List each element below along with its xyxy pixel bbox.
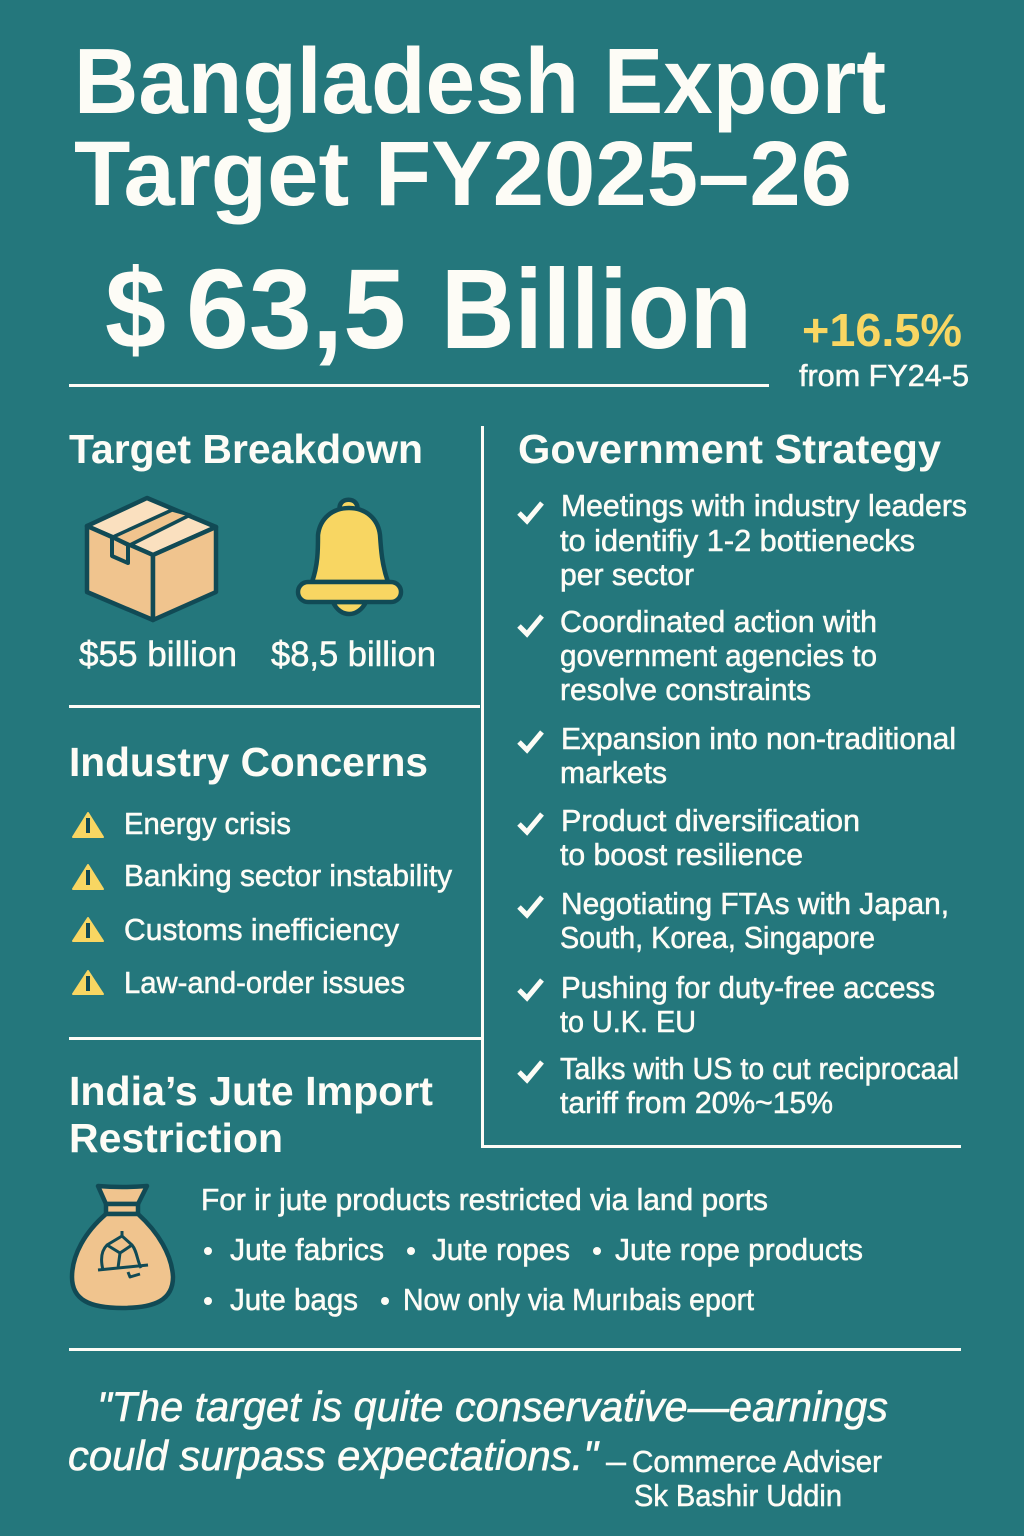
strategy item: product diversification: to boost resilience (560, 837, 803, 872)
strategy item: expansion (519, 721, 956, 790)
title: Target FY2025–26 (74, 123, 852, 225)
strategy item: meetings: Meetings with industry leaders (561, 488, 967, 523)
quote attribution: Commerce Adviser (632, 1444, 882, 1479)
text: restricted products: Jute ropes (432, 1232, 570, 1267)
concern: law-and-order issues: Law-and-order issues (124, 965, 405, 1000)
title: Bangladesh Export (74, 29, 886, 133)
quote attribution: Sk Bashir Uddin (634, 1478, 842, 1513)
concern: customs inefficiency: Customs inefficiency (124, 912, 399, 947)
heading: india's jute import restriction: Restriction (69, 1115, 283, 1161)
strategy item: product diversification: Product diversification (561, 803, 860, 838)
label: $55 billion: $55 billion (79, 635, 237, 674)
panel: target breakdown (69, 426, 436, 674)
headline figure: total target: Billion (441, 246, 752, 372)
panel: india's jute import restriction (69, 1068, 863, 1317)
strategy item: FTAs (519, 886, 949, 955)
growth callout: +16.5% (802, 304, 962, 356)
strategy item: duty-free access (519, 970, 935, 1039)
strategy item: FTAs: Negotiating FTAs with Japan, (561, 886, 949, 921)
strategy item: product diversification (519, 803, 860, 872)
strategy item: FTAs: South, Korea, Singapore (560, 920, 875, 955)
label: $8,5 billion: $8,5 billion (271, 635, 436, 674)
strategy item: meetings: to identifiy 1-2 bottienecks (560, 523, 915, 558)
strategy item: US tariff talks: Talks with US to cut reciprocaal (560, 1051, 959, 1086)
text: restricted products: Now only via Murıbais eport (403, 1282, 754, 1317)
strategy item: expansion: Expansion into non-traditional (561, 721, 956, 756)
headline figure: total target: $ (105, 246, 166, 372)
heading: india's jute import restriction (69, 1068, 433, 1161)
quote: could surpass expectations." (68, 1432, 600, 1479)
growth callout (799, 304, 969, 393)
quote attribution (606, 1444, 882, 1513)
headline figure: total target (105, 246, 752, 372)
heading: government strategy: Government Strategy (518, 426, 941, 472)
heading: india's jute import restriction: India’s Jute Import (69, 1068, 433, 1114)
text: restricted products: Jute bags (230, 1282, 358, 1317)
title (74, 29, 886, 225)
strategy item: duty-free access: to U.K. EU (560, 1004, 696, 1039)
strategy item: coordinated action (519, 604, 877, 707)
text: restricted products: Jute fabrics (230, 1232, 384, 1267)
text: restricted products: Jute rope products (615, 1232, 863, 1267)
strategy item: meetings (519, 488, 967, 592)
strategy item: expansion: markets (560, 755, 667, 790)
strategy item: duty-free access: Pushing for duty-free access (561, 970, 935, 1005)
panel: government strategy (518, 426, 967, 1120)
quote: "The target is quite conservative—earnings (97, 1383, 888, 1430)
panel: industry concerns (69, 739, 452, 1000)
headline figure: total target: 63,5 (186, 246, 406, 372)
quote attribution: — (606, 1444, 626, 1479)
concern: banking sector instability: Banking sector instability (124, 858, 452, 893)
strategy item: coordinated action: resolve constraints (560, 672, 811, 707)
strategy item: US tariff talks: tariff from 20%~15% (560, 1085, 833, 1120)
strategy item: coordinated action: government agencies to (560, 638, 877, 673)
heading: target breakdown: Target Breakdown (69, 426, 423, 472)
strategy item: US tariff talks (519, 1051, 959, 1120)
heading: industry concerns: Industry Concerns (69, 739, 428, 785)
growth callout: from FY24-5 (799, 358, 969, 393)
quote (68, 1383, 888, 1513)
text: restricted products (201, 1182, 863, 1317)
strategy item: coordinated action: Coordinated action with (560, 604, 877, 639)
icon: cardboard box (87, 498, 216, 620)
concern: energy crisis: Energy crisis (124, 806, 291, 841)
icon: bell (298, 500, 401, 614)
strategy item: meetings: per sector (560, 557, 694, 592)
text: restricted products: For ir jute products restricted via land ports (201, 1182, 768, 1217)
icon: jute sack (72, 1186, 173, 1308)
